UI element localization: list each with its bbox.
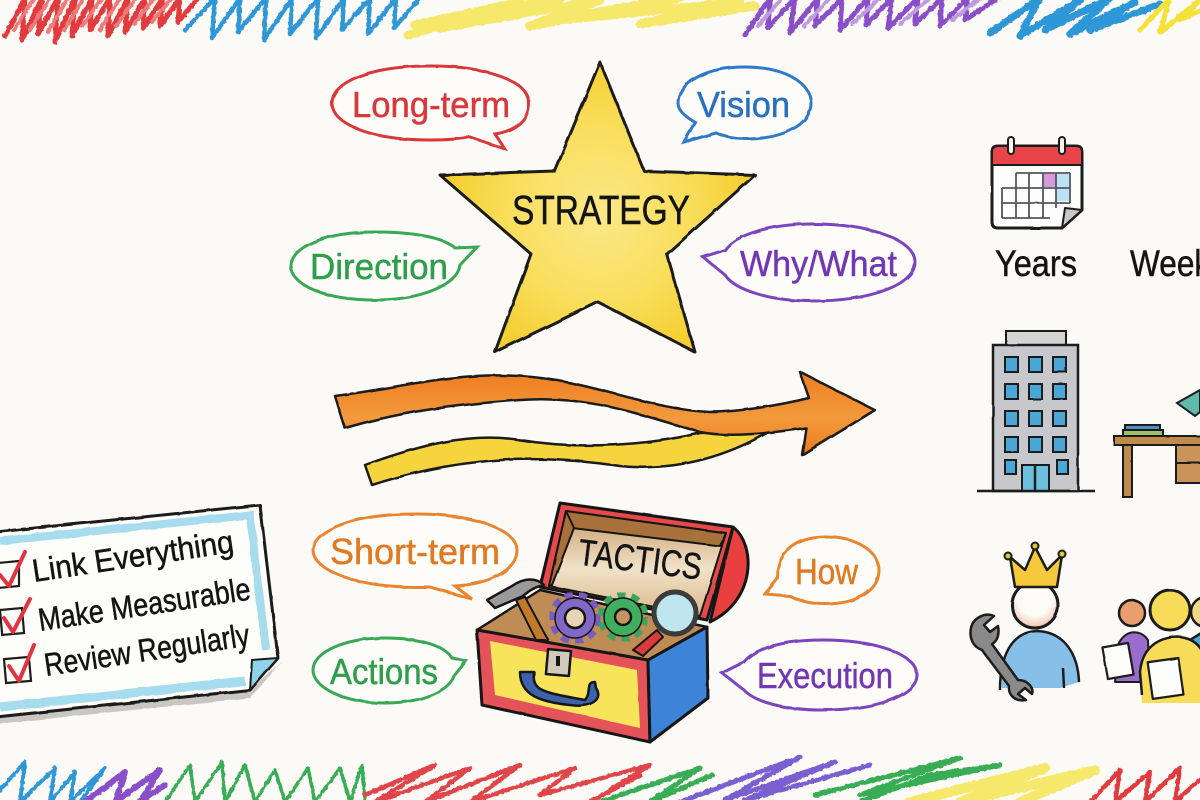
- bubble: How: How: [795, 551, 859, 592]
- bubble: Execution: Execution: [757, 655, 893, 696]
- arrow: orange strategy path: [335, 372, 875, 455]
- bubble: How: [765, 537, 879, 604]
- bubble: Actions: Actions: [330, 651, 438, 692]
- checklist item: Link Everything: Link Everything: [30, 523, 236, 589]
- tool: purple gear: [552, 595, 598, 641]
- toolbox side: [648, 627, 708, 742]
- checklist item: Make Measurable: Make Measurable: [36, 571, 253, 638]
- icon: calendar: [992, 137, 1082, 228]
- star: strategy: [440, 62, 755, 352]
- bubble: Direction: Direction: [310, 246, 448, 287]
- bubble: Why/What: Why/What: [740, 243, 897, 284]
- label: Years: Years: [995, 243, 1077, 284]
- toolbox front: [477, 630, 650, 742]
- icon: desk with lamp and books: [1114, 390, 1200, 497]
- tool: magnifying glass: [633, 592, 696, 656]
- person head: [1012, 582, 1058, 628]
- note paper: [0, 505, 282, 724]
- bubble: Vision: [678, 67, 811, 142]
- toolbox lock: [546, 649, 571, 676]
- checklist item: Review Regularly: Review Regularly: [42, 617, 252, 683]
- wrench: [970, 615, 1032, 700]
- bubble: Short-term: Short-term: [330, 531, 500, 572]
- team member: centre, yellow: [1140, 590, 1200, 703]
- toolbox: tactics: [477, 503, 748, 742]
- toolbox lid: [540, 503, 748, 622]
- team member: left, purple: [1115, 600, 1150, 682]
- bubble: Long-term: [332, 66, 529, 149]
- bubble: Direction: [291, 232, 477, 300]
- heading: STRATEGY: STRATEGY: [512, 187, 690, 233]
- sticky note checklist: [0, 505, 282, 724]
- icon: team with notepads: [1102, 590, 1200, 703]
- crown: [1004, 542, 1066, 587]
- tool: green gear: [601, 595, 645, 639]
- bubble: Short-term: [313, 514, 517, 599]
- notepad: left: [1102, 643, 1134, 679]
- arrow: yellow tactics path: [365, 430, 772, 485]
- tool: hammer: [487, 580, 548, 640]
- icon: manager with crown and wrench: [970, 542, 1079, 700]
- toolbox handle: [520, 672, 598, 706]
- team member: right, blue: [1190, 597, 1200, 660]
- toolbox label: TACTICS: TACTICS: [576, 532, 704, 587]
- toolbox interior: [477, 590, 707, 660]
- bubble: Long-term: Long-term: [352, 84, 510, 125]
- bubble: Execution: [722, 640, 917, 710]
- bubble: Actions: [313, 638, 466, 703]
- top crayon scribble border: [5, 0, 1200, 42]
- bubble: Why/What: [703, 224, 915, 301]
- bubble: Vision: Vision: [697, 84, 790, 125]
- notepad: centre: [1148, 658, 1183, 699]
- bottom crayon scribble border: [0, 757, 1200, 800]
- icon: office building: [977, 331, 1095, 491]
- checkbox icons: [0, 552, 34, 683]
- person body: [1000, 631, 1079, 690]
